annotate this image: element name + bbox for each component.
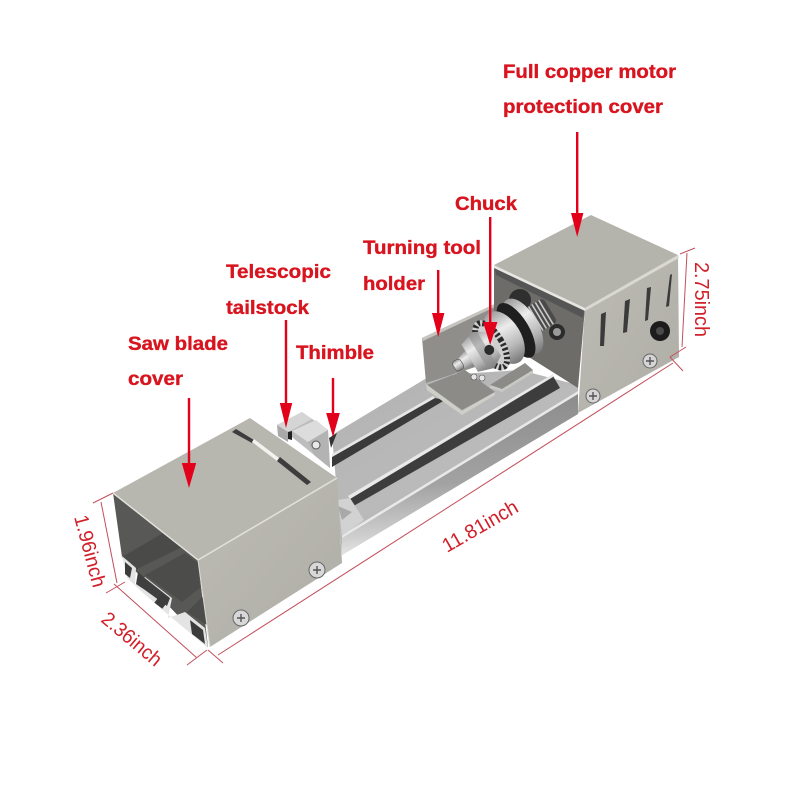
dimension: 1.96inch height — [69, 493, 125, 593]
arrow: turning tool holder — [432, 270, 444, 337]
label: telescopic tailstock: Telescopic — [226, 262, 331, 283]
arrow: thimble — [326, 378, 340, 437]
label: saw blade cover: Saw blade — [128, 334, 228, 355]
vent slots — [600, 274, 672, 346]
power socket — [650, 321, 670, 341]
arrow: saw blade cover — [182, 398, 196, 488]
arrow: motor cover — [571, 132, 583, 237]
label: saw blade cover: cover — [128, 369, 184, 390]
rail profile end — [122, 556, 208, 648]
cone and nose — [457, 350, 474, 371]
saw blade cover — [113, 418, 342, 648]
label: turning tool holder — [363, 238, 481, 295]
label: telescopic tailstock: tailstock — [226, 298, 309, 319]
silver rear ring — [494, 292, 552, 361]
screws — [233, 610, 249, 626]
label: full copper motor protection cover: protection cover — [503, 97, 664, 118]
dimension: 2.36inch width — [97, 584, 207, 671]
spring — [523, 298, 557, 334]
turning tool holder bracket — [422, 303, 533, 415]
dimension: 11.81inch length — [208, 357, 683, 663]
label: thimble: Thimble — [296, 343, 374, 364]
black ring — [489, 297, 543, 364]
label: turning tool holder: holder — [363, 274, 426, 295]
gear teeth — [465, 314, 518, 377]
chuck — [438, 283, 566, 394]
aluminium rail bed — [332, 370, 578, 555]
label: full copper motor protection cover — [503, 62, 677, 118]
screws — [586, 389, 600, 403]
arrow: telescopic tailstock — [280, 320, 292, 428]
label: saw blade cover — [128, 334, 228, 390]
telescopic tailstock and thimble — [277, 412, 337, 468]
interior — [113, 493, 208, 647]
dimension: 1.96inch height: 1.96inch — [69, 513, 110, 590]
jaw body hex — [459, 326, 505, 376]
label: turning tool holder: Turning tool — [363, 238, 481, 259]
rear nut — [549, 324, 565, 340]
label: chuck: Chuck — [455, 194, 517, 215]
blade slot — [232, 429, 254, 443]
dimension: 2.75inch height — [670, 248, 712, 357]
motor protection cover — [494, 215, 679, 413]
arrow: chuck — [483, 217, 497, 345]
label: full copper motor protection cover: Full copper motor — [503, 62, 677, 83]
dimension: 2.75inch height: 2.75inch — [690, 262, 712, 337]
dimension: 2.36inch width: 2.36inch — [97, 608, 166, 671]
lathe machine photo illustration — [113, 215, 679, 648]
sleeve — [474, 304, 534, 371]
label: telescopic tailstock — [226, 262, 331, 319]
dimension: 11.81inch length: 11.81inch — [438, 496, 522, 557]
